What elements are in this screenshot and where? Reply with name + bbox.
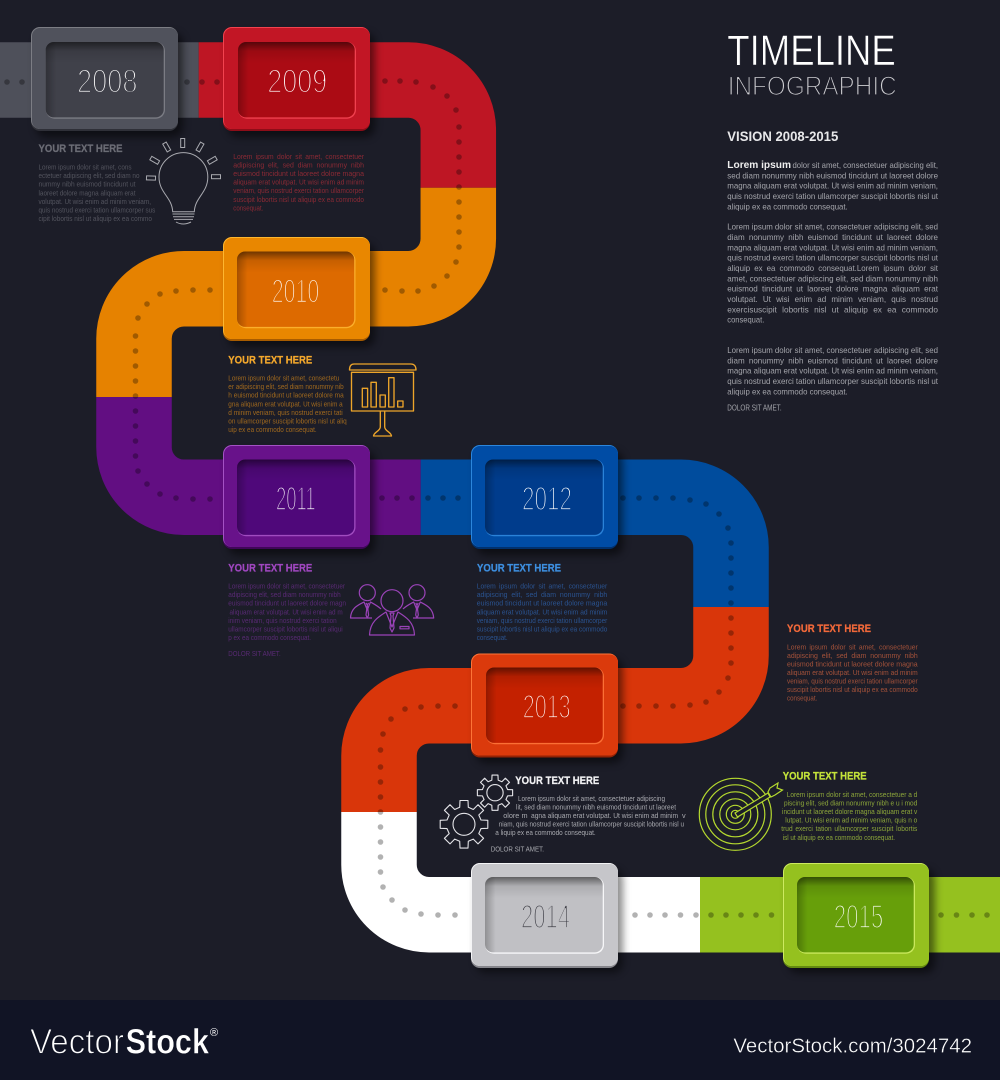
heading 2012: YOUR TEXT HERE xyxy=(477,562,561,574)
body 2008: cipit lobortis nisl ut aliquip ex ea commo xyxy=(38,214,152,223)
year card 2010 xyxy=(223,237,375,347)
body 2010: Lorem ipsum dolor sit amet, consectetu xyxy=(228,374,339,383)
text block 2015 xyxy=(781,770,918,842)
footer strip xyxy=(0,1000,1000,1080)
title xyxy=(727,27,897,101)
body 2008 xyxy=(38,163,156,223)
vision paragraph three: quis nostrud exerci tation ullamcorper suscipit lobortis nisl ut xyxy=(727,377,939,386)
body 2011: aliquam erat volutpat. Ut wisi enim ad m xyxy=(230,607,343,616)
body 2010: on ullamcorper suscipit lobortis nisl ut aliq xyxy=(228,416,347,425)
year card 2015 xyxy=(783,863,935,973)
year label 2011: 2011 xyxy=(276,480,316,517)
body 2014: olore xyxy=(503,811,519,820)
body 2015: trud exerci tation ullamcorper suscipit lobortis xyxy=(781,824,918,833)
body 2008: laoreet dolore magna aliquam erat xyxy=(38,188,136,197)
body 2014: agna aliquam erat volutpat. Ut wisi enim ad minim xyxy=(531,811,678,820)
body 2010 xyxy=(228,374,347,434)
text block 2009: aliquam erat volutpat. Ut wisi enim ad minim xyxy=(233,178,364,187)
body 2008: Lorem ipsum dolor sit amet, cons xyxy=(38,163,132,172)
body 2014 xyxy=(495,794,686,837)
road segment 2010 xyxy=(134,188,458,397)
road segment 2008 xyxy=(0,42,199,118)
body 2010: d minim veniam, quis nostrud exerci tati xyxy=(228,408,343,417)
text block 2010 xyxy=(228,354,347,434)
vision paragraph three: diam nonummy nibh euismod tincidunt ut laoreet dolore xyxy=(727,356,938,365)
body 2014: niam, quis nostrud exerci tation ullamcorper suscipit lobortis nisl u xyxy=(499,820,684,829)
body 2015: Lorem ipsum dolor sit amet, consectetuer a d xyxy=(787,790,917,799)
year label 2009: 2009 xyxy=(267,63,327,100)
body 2012: consequat. xyxy=(477,633,508,642)
vision paragraph two: consequat. xyxy=(727,316,764,325)
body 2012: Lorem ipsum dolor sit amet, consectetuer xyxy=(477,582,608,591)
heading 2015: YOUR TEXT HERE xyxy=(783,770,867,782)
body 2014: a liquip ex ea commodo consequat. xyxy=(495,828,596,837)
vision heading: VISION 2008-2015 xyxy=(727,129,839,144)
year label 2012: 2012 xyxy=(522,480,572,517)
road segment 2011 xyxy=(134,397,421,497)
body 2008: quis nostrud exerci tation ullamcorper sus xyxy=(38,205,156,214)
body 2013: adipiscing elit, sed diam nonummy nibh xyxy=(787,651,918,660)
body 2013: aliquam erat volutpat. Ut wisi enim ad minim xyxy=(787,668,918,677)
body 2008: nummy nibh euismod tincidunt ut xyxy=(38,180,136,189)
body 2010: er adipiscing elit, sed diam nonummy nib xyxy=(228,382,344,391)
text block 2009: suscipit lobortis nisl ut aliquip ex ea commodo xyxy=(233,195,364,204)
body 2015 xyxy=(781,790,918,842)
body 2014: m xyxy=(522,811,528,820)
text block 2014 xyxy=(491,775,686,853)
year label 2010: 2010 xyxy=(272,272,319,310)
year label 2014: 2014 xyxy=(521,898,570,935)
body 2011: adipiscing elit, sed diam nonummy nibh xyxy=(228,590,341,599)
body 2013: suscipit lobortis nisl ut aliquip ex ea commodo xyxy=(787,685,918,694)
body 2010: gna aliquam erat volutpat. Ut wisi enim a xyxy=(228,399,344,408)
vision paragraph one: sed diam nonummy nibh euismod tincidunt ut laoreet dolore xyxy=(727,171,938,180)
text block 2011 xyxy=(228,562,346,658)
icon: presentation board with bar chart xyxy=(350,364,416,436)
vision paragraph three xyxy=(727,346,939,396)
footer image id: VectorStock.com/3024742 xyxy=(733,1036,972,1058)
icon: gears xyxy=(440,775,513,848)
footer logo: ® xyxy=(210,1027,218,1039)
text block 2009 xyxy=(233,152,365,212)
body 2012: adipiscing elit, sed diam nonummy nibh xyxy=(477,590,607,599)
body 2010: h euismod tincidunt ut laoreet dolore ma xyxy=(228,391,345,400)
body 2012 xyxy=(477,582,608,642)
vision text column xyxy=(727,129,939,413)
vision paragraph one: aliquip ex ea commodo consequat. xyxy=(727,202,848,211)
body 2015: piscing elit, sed diam nonummy nibh e u i mod xyxy=(784,799,917,808)
large gear xyxy=(440,800,488,848)
heading 2013: YOUR TEXT HERE xyxy=(787,623,871,635)
icon: team of three people xyxy=(350,585,434,635)
body 2011 xyxy=(228,582,346,642)
heading 2008: YOUR TEXT HERE xyxy=(38,143,122,155)
year card 2013 xyxy=(471,654,623,763)
text block 2009: adipiscing elit, sed diam nonummy nibh xyxy=(233,161,364,170)
title line one: TIMELINE xyxy=(727,27,896,75)
sign-off 2014: DOLOR SIT AMET. xyxy=(491,844,544,853)
title line two: INFOGRAPHIC xyxy=(728,71,897,101)
body 2013: veniam, quis nostrud exerci tation ullamcorper xyxy=(787,676,918,686)
road segment 2012 xyxy=(421,497,731,607)
year label 2013: 2013 xyxy=(523,688,571,725)
body 2011: inim veniam, quis nostrud exerci tation xyxy=(228,616,337,625)
body 2013: euismod tincidunt ut laoreet dolore magna xyxy=(787,659,919,668)
body 2013 xyxy=(787,642,919,703)
vision paragraph two: volutpat. Ut wisi enim ad minim veniam, quis nostrud xyxy=(727,295,938,304)
body 2011: p ex ea commodo consequat. xyxy=(228,633,311,642)
icon: target with arrow xyxy=(699,778,782,850)
body 2014: Lorem ipsum dolor sit amet, consectetuer adipiscing xyxy=(518,794,665,803)
year card 2009 xyxy=(223,27,375,137)
year card 2014 xyxy=(471,863,623,973)
footer logo xyxy=(30,1022,218,1061)
vision paragraph two: Lorem ipsum dolor sit amet, consectetuer adipiscing elit, sed xyxy=(727,223,938,232)
text block 2009: Lorem ipsum dolor sit amet, consectetuer xyxy=(233,152,365,161)
vision paragraph two: aliquip ex ea commodo consequat.Lorem ipsum dolor sit xyxy=(727,264,939,273)
road segment 2015 xyxy=(700,877,1000,952)
road segment 2013 xyxy=(379,607,731,812)
text block 2008 xyxy=(38,143,156,223)
vision paragraph one xyxy=(727,160,939,211)
road segment 2014 xyxy=(379,812,700,915)
text block 2013 xyxy=(787,623,919,703)
winding timeline road xyxy=(0,80,1000,915)
year label 2008: 2008 xyxy=(77,63,138,100)
body 2012: euismod tincidunt ut laoreet dolore magna xyxy=(477,599,608,608)
heading 2014: YOUR TEXT HERE xyxy=(515,775,599,787)
body 2012: suscipit lobortis nisl ut aliquip ex ea commodo xyxy=(477,624,607,633)
body 2013: Lorem ipsum dolor sit amet, consectetuer xyxy=(787,642,918,651)
footer logo: Vector xyxy=(30,1022,124,1061)
vision paragraph three: magna aliquam erat volutpat. Ut wisi enim ad minim veniam, xyxy=(727,367,938,376)
vision paragraph one: magna aliquam erat volutpat. Ut wisi enim ad minim veniam, xyxy=(727,182,938,191)
vision sign-off: DOLOR SIT AMET. xyxy=(727,404,782,413)
body 2014: lit, sed diam nonummy nibh euismod tincidunt ut laoreet xyxy=(516,803,676,812)
body 2015: incidunt ut laoreet dolore magna aliquam erat v xyxy=(782,807,918,816)
heading 2010: YOUR TEXT HERE xyxy=(228,354,312,366)
vision paragraph two xyxy=(727,223,939,325)
body 2008: ectetuer adipiscing elit, sed diam no xyxy=(38,171,140,180)
sign-off 2011: DOLOR SIT AMET. xyxy=(228,649,281,658)
vision paragraph two: diam nonummy nibh euismod tincidunt ut laoreet dolore xyxy=(727,233,938,242)
footer logo: Stock xyxy=(126,1022,209,1061)
vision paragraph two: exercisuscipit lobortis nisl ut aliquip ex ea commodo xyxy=(727,305,938,314)
vision paragraph two: amet, consectetuer adipiscing elit, sed diam nonummy nibh xyxy=(727,274,938,283)
year label 2015: 2015 xyxy=(834,898,883,935)
year card 2008 xyxy=(31,27,183,137)
body 2011: euismod tincidunt ut laoreet dolore magn xyxy=(228,599,346,608)
vision paragraph one: Lorem ipsum xyxy=(727,160,791,171)
body 2010: uip ex ea commodo consequat. xyxy=(228,425,317,434)
vision paragraph two: quis nostrud exerci tation ullamcorper suscipit lobortis nisl ut xyxy=(727,254,939,263)
icon: light bulb xyxy=(146,138,220,224)
small gear xyxy=(477,775,513,810)
text block 2009: euismod tincidunt ut laoreet dolore magna xyxy=(233,169,365,178)
body 2015: isl ut aliquip ex ea commodo consequat. xyxy=(783,833,895,842)
text block 2009: consequat. xyxy=(233,203,263,212)
road segment 2009 xyxy=(199,80,458,188)
body 2012: veniam, quis nostrud exerci tation ullamcorper xyxy=(477,616,608,625)
text block 2012 xyxy=(477,562,608,642)
body 2011: Lorem ipsum dolor sit amet, consectetuer xyxy=(228,582,345,591)
vision paragraph two: euismod tincidunt ut laoreet dolore magna aliquam erat xyxy=(727,285,939,294)
body 2008: volutpat. Ut wisi enim ad minim veniam, xyxy=(38,197,151,206)
body 2015: lutpat. Ut wisi enim ad minim veniam, quis n o xyxy=(785,816,917,825)
body 2011: ullamcorper suscipit lobortis nisl ut aliqui xyxy=(228,624,343,633)
year card 2011 xyxy=(223,445,375,555)
vision paragraph three: aliquip ex ea commodo consequat. xyxy=(727,387,848,396)
vision paragraph one: quis nostrud exerci tation ullamcorper suscipit lobortis nisl ut xyxy=(727,192,939,201)
text block 2009: veniam, quis nostrud exerci tation ullamcorper xyxy=(233,186,364,195)
year card 2012 xyxy=(471,445,623,555)
heading 2011: YOUR TEXT HERE xyxy=(228,562,312,574)
vision paragraph two: magna aliquam erat volutpat. Ut wisi enim ad minim veniam, xyxy=(727,243,938,252)
body 2012: aliquam erat volutpat. Ut wisi enim ad minim xyxy=(477,607,607,616)
body 2013: consequat. xyxy=(787,694,817,703)
vision paragraph one: dolor sit amet, consectetuer adipiscing elit, xyxy=(792,161,938,170)
dotted centre line of road xyxy=(4,78,990,918)
body 2014: v xyxy=(682,811,686,820)
vision paragraph three: Lorem ipsum dolor sit amet, consectetuer adipiscing elit, sed xyxy=(727,346,938,355)
